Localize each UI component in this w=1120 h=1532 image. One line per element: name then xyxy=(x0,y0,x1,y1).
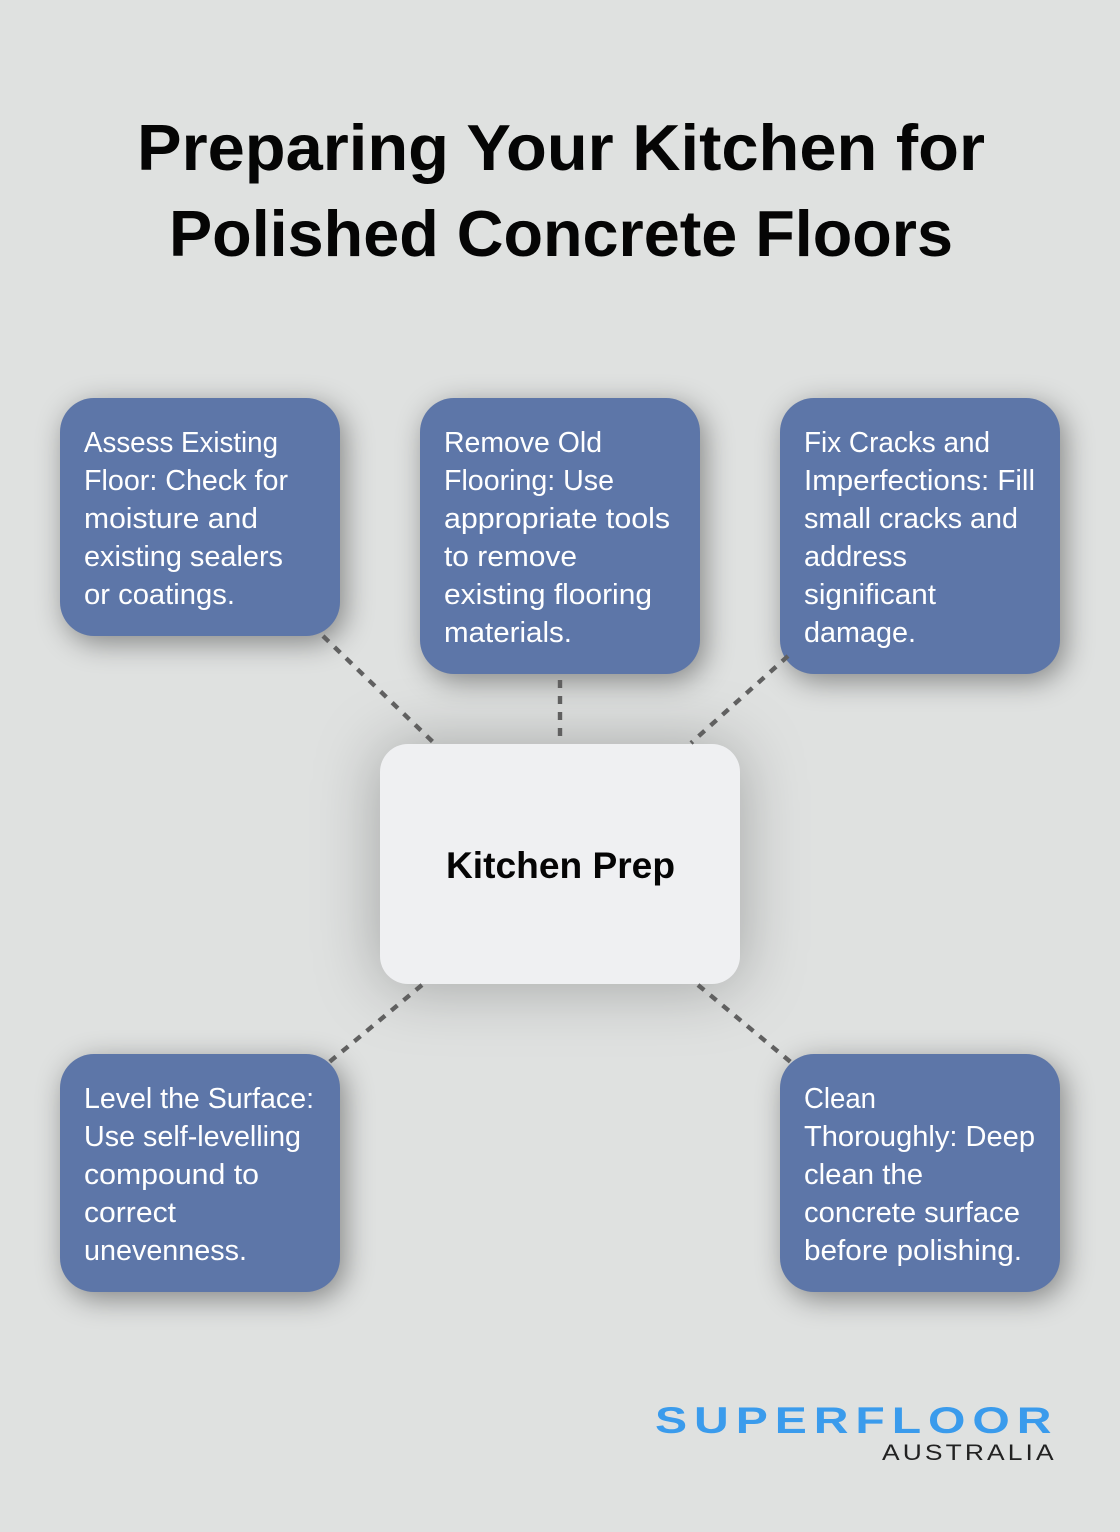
title: Preparing Your Kitchen for xyxy=(137,111,985,184)
panel: level the surface: Use self-levelling xyxy=(84,1121,301,1153)
panel: level the surface xyxy=(60,1054,340,1292)
panel: fix cracks and imperfections: Imperfections: Fill xyxy=(804,465,1035,497)
panel: assess existing floor xyxy=(60,398,340,636)
panel: fix cracks and imperfections: Fix Cracks and xyxy=(804,427,990,459)
logo: Superfloor Australia xyxy=(655,1400,1054,1465)
panel: assess existing floor: existing sealers xyxy=(84,541,283,573)
panel: assess existing floor: moisture and xyxy=(84,503,258,535)
panel: clean thoroughly: Clean xyxy=(804,1083,876,1115)
panel: remove old flooring xyxy=(420,398,700,674)
panel: clean thoroughly: clean the xyxy=(804,1159,923,1191)
panel: level the surface: correct xyxy=(84,1197,176,1229)
panel: remove old flooring: Remove Old xyxy=(444,427,602,459)
panel: kitchen prep centre box xyxy=(380,744,740,984)
connector: assess existing floor to centre xyxy=(323,636,434,743)
panel: level the surface: compound to xyxy=(84,1159,259,1191)
panel: fix cracks and imperfections: damage. xyxy=(804,617,916,649)
title: Polished Concrete Floors xyxy=(169,197,953,270)
logo: Superfloor Australia: AUSTRALIA xyxy=(882,1441,1054,1465)
panel: remove old flooring: Flooring: Use xyxy=(444,465,614,497)
panel: fix cracks and imperfections: small cracks and xyxy=(804,503,1018,535)
connector: level the surface to centre xyxy=(327,985,422,1064)
panel: remove old flooring: materials. xyxy=(444,617,572,649)
connector: fix cracks to centre xyxy=(691,656,788,743)
panel: assess existing floor: or coatings. xyxy=(84,579,235,611)
panel: level the surface: Level the Surface: xyxy=(84,1083,314,1115)
connector: remove old flooring to centre xyxy=(558,680,562,744)
logo: Superfloor Australia: SUPERFLOOR xyxy=(655,1400,1052,1442)
panel: kitchen prep centre box: Kitchen Prep xyxy=(446,845,675,886)
panel: remove old flooring: existing flooring xyxy=(444,579,652,611)
panel: assess existing floor: Floor: Check for xyxy=(84,465,288,497)
panel: fix cracks and imperfections xyxy=(780,398,1060,674)
panel: clean thoroughly: before polishing. xyxy=(804,1235,1022,1267)
panel: clean thoroughly xyxy=(780,1054,1060,1292)
panel: level the surface: unevenness. xyxy=(84,1235,247,1267)
panel: fix cracks and imperfections: address xyxy=(804,541,907,573)
panel: clean thoroughly: Thoroughly: Deep xyxy=(804,1121,1035,1153)
panel: fix cracks and imperfections: significant xyxy=(804,579,936,611)
connector: clean thoroughly to centre xyxy=(698,985,793,1064)
panel: remove old flooring: appropriate tools xyxy=(444,503,670,535)
title xyxy=(137,111,985,270)
panel: remove old flooring: to remove xyxy=(444,541,577,573)
panel: assess existing floor: Assess Existing xyxy=(84,427,278,459)
panel: clean thoroughly: concrete surface xyxy=(804,1197,1020,1229)
